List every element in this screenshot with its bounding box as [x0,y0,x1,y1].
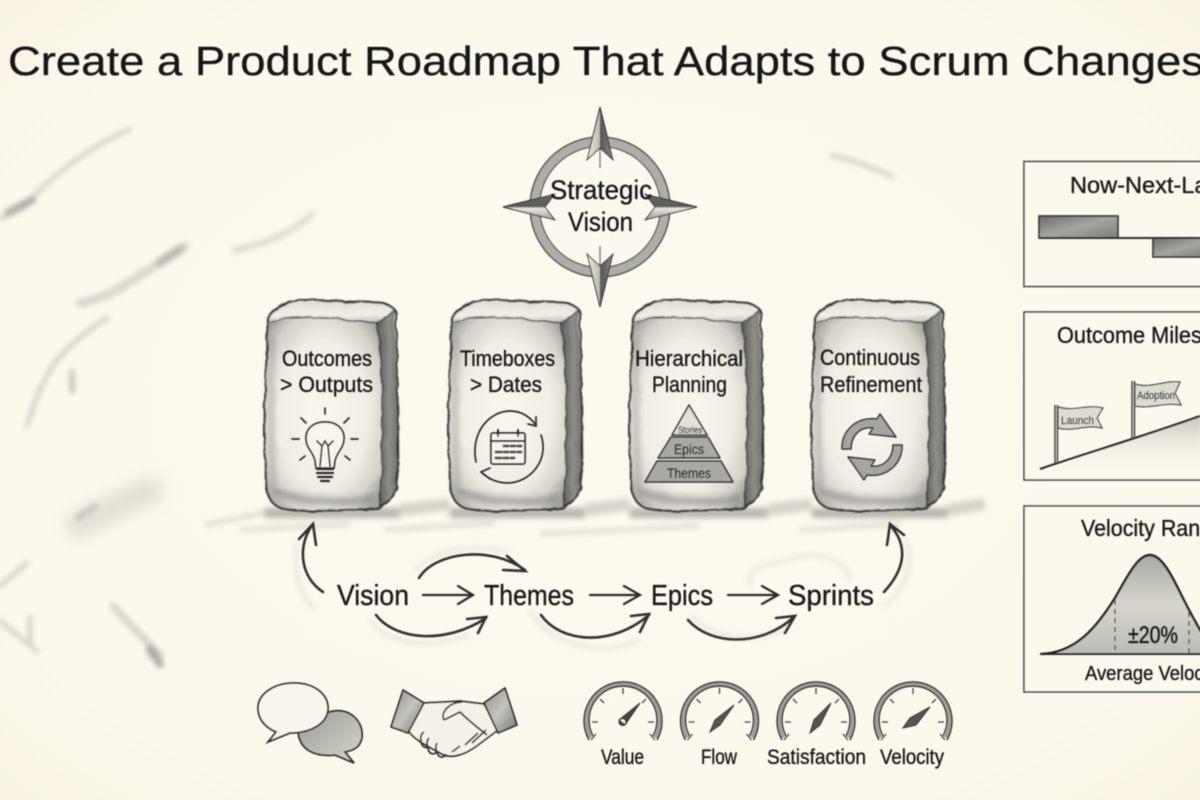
straight arrows [423,586,778,604]
panel: Outcome Milestones [1024,312,1200,480]
panel: Now-Next-Later [1024,162,1200,286]
gauge label: Satisfaction [767,746,866,769]
icon: pyramid of stories, epics and themes: Stories [678,425,702,435]
icon: pyramid of stories, epics and themes [645,405,733,482]
bell curve [1040,555,1200,654]
needle [903,707,930,728]
compass label: Vision [568,207,633,237]
range percent: ±20% [1128,622,1178,649]
gauge label: Flow [701,746,738,769]
flag: Adoption [1132,381,1181,439]
compass label: Strategic [550,175,652,205]
compass label [550,175,652,237]
stone pillar: Continuous Refinement [811,300,945,511]
icon: pyramid of stories, epics and themes: Themes [667,465,711,481]
gauge label: Velocity [880,746,944,769]
icon: calendar with cycle arrows [475,411,543,483]
gauge label: Value [601,746,644,769]
stone 2 label: > Dates [470,372,542,397]
flow: Vision to Sprints [296,524,909,648]
flow labels: Sprints [788,580,874,612]
compass: Strategic Vision [503,107,697,307]
gauge: Value [584,682,662,769]
flag: Launch [1055,405,1103,464]
stone pillar: Timeboxes > Dates [448,300,582,511]
icon: pyramid of stories, epics and themes: Epics [674,441,704,457]
stone pillar: Outcomes > Outputs [264,300,398,511]
flag: Launch: Launch [1061,415,1094,427]
stone 4 label: Refinement [820,372,922,397]
needle [710,705,734,732]
gauge: Satisfaction [767,682,866,769]
needle [619,703,640,726]
stone 3 label: Planning [652,372,727,397]
flow labels: Themes [484,580,574,612]
flow labels: Vision [337,580,409,612]
stone 2 label: Timeboxes [460,346,555,371]
step bars [1039,216,1200,257]
icon: handshake [391,688,517,757]
gauge: Flow [680,682,758,769]
faint ghost strokes around flow [296,540,909,648]
title: Create a Product Roadmap That Adapts to Scrum Changes [8,38,1200,84]
stone 4 label [820,345,922,397]
stone 4 label: Continuous [820,345,920,370]
flow labels [337,580,874,612]
stone 1 label: > Outputs [280,372,373,397]
icon: speech bubbles [258,683,362,763]
flag: Adoption: Adoption [1137,390,1175,402]
background charcoal smudges [0,129,892,664]
panel: Velocity Range [1024,506,1200,692]
needle [810,703,831,733]
rising slope [1040,416,1200,472]
stone 3 label: Hierarchical [635,346,743,371]
icon: light bulb [292,408,358,481]
curved feedback arrows [299,524,904,640]
gauge: Velocity [874,682,952,769]
flow labels: Epics [651,580,713,612]
icon: refresh arrows [842,414,902,480]
stone 3 label [635,346,743,397]
stone 2 label [460,346,555,397]
stone 1 label [280,346,373,397]
ground shadow beneath stones [205,504,985,534]
stone 1 label: Outcomes [282,346,372,371]
stone pillar: Hierarchical Planning [629,300,763,511]
